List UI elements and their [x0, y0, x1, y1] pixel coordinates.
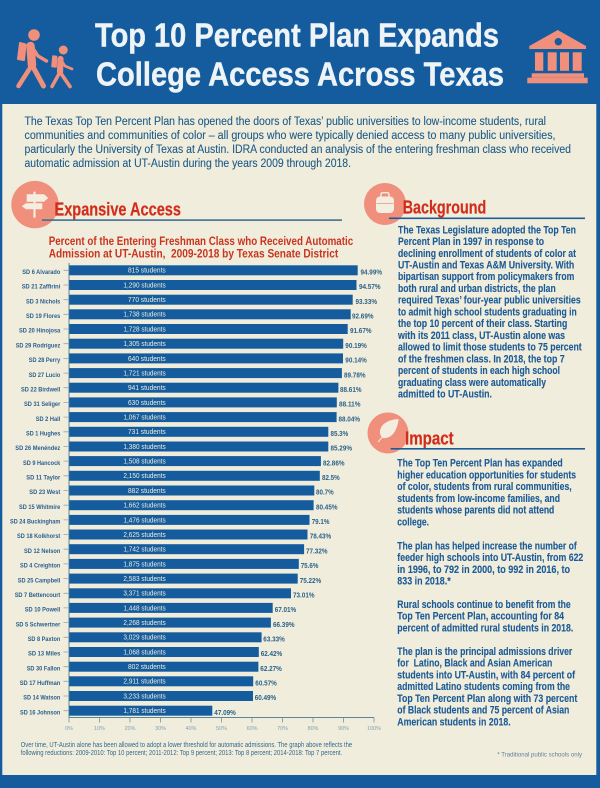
- percent values: 80.45%: [316, 504, 338, 511]
- intro text: [24, 114, 571, 170]
- percent values: 88.04%: [338, 416, 360, 423]
- student counts: 1,068 students: [123, 647, 166, 656]
- icon: two hikers: [18, 29, 72, 86]
- district labels: SD 23 West: [29, 489, 61, 496]
- district labels: SD 9 Hancock: [23, 460, 61, 467]
- percent values: 62.27%: [260, 666, 282, 673]
- x axis labels: [65, 726, 381, 732]
- x axis labels: 60%: [247, 726, 258, 732]
- student counts: 3,029 students: [123, 633, 166, 642]
- heading: Impact: Impact: [405, 428, 454, 448]
- student counts: 1,875 students: [123, 559, 166, 568]
- student counts: 3,371 students: [123, 589, 166, 598]
- district labels: SD 8 Paxton: [28, 636, 60, 643]
- student counts: 1,738 students: [123, 310, 166, 319]
- district labels: SD 29 Rodríguez: [16, 342, 60, 349]
- x axis labels: 100%: [367, 726, 381, 732]
- student counts: 941 students: [128, 383, 166, 392]
- student counts: 882 students: [128, 486, 166, 495]
- student counts: 630 students: [128, 398, 166, 407]
- student counts: 1,728 students: [123, 324, 166, 333]
- percent values: 63.33%: [263, 636, 285, 644]
- district labels: SD 3 Nichols: [26, 298, 61, 305]
- district labels: SD 21 Zaffirini: [22, 284, 61, 291]
- student counts: 640 students: [128, 354, 166, 363]
- text block: background: Percent Plan in 1997 in response to: [398, 236, 544, 248]
- percent values: 79.1%: [312, 519, 329, 526]
- chart title: Percent of the Entering Freshman Class who Received Automatic: [49, 234, 353, 248]
- percent values: 93.33%: [356, 299, 377, 306]
- percent values: 90.19%: [345, 343, 367, 350]
- percent values: 78.43%: [310, 534, 331, 541]
- district labels: SD 10 Powell: [25, 607, 61, 614]
- x axis labels: 40%: [186, 726, 197, 732]
- percent values: 85.29%: [330, 446, 352, 453]
- district labels: SD 26 Menéndez: [15, 445, 60, 452]
- district labels: SD 20 Hinojosa: [19, 328, 61, 335]
- percent values: 89.78%: [344, 372, 366, 379]
- icon: leaf in circle: [368, 412, 408, 454]
- text block: impact: students from low-income families, and: [397, 493, 560, 505]
- percent values: 60.57%: [255, 680, 277, 688]
- student counts: 1,290 students: [123, 280, 166, 289]
- intro text: automatic admission at UT-Austin during the years 2009 through 2018.: [24, 156, 351, 170]
- chart footnote: Over time, UT-Austin alone has been allowed to adopt a lower threshold for automatic admissions. The graph above reflects the: [21, 740, 352, 749]
- text block: background: [397, 224, 582, 400]
- student counts: 770 students: [128, 295, 166, 304]
- student counts: 1,781 students: [123, 706, 166, 715]
- x axis labels: 70%: [277, 726, 288, 732]
- student counts: 1,448 students: [123, 603, 166, 612]
- percent values: 60.49%: [255, 695, 276, 702]
- student counts: 815 students: [128, 266, 166, 275]
- student counts: 1,742 students: [123, 545, 166, 554]
- heading: Expansive Access: Expansive Access: [54, 200, 181, 220]
- text block: background: percent of students in each high school: [398, 365, 560, 377]
- district labels: SD 30 Fallon: [27, 665, 60, 672]
- student counts: 731 students: [128, 427, 166, 436]
- district labels: SD 12 Nelson: [24, 548, 60, 555]
- x axis labels: 20%: [125, 726, 136, 732]
- district labels: SD 15 Whitmire: [19, 504, 61, 511]
- x axis labels: 30%: [155, 726, 166, 732]
- district labels: SD 1 Hughes: [26, 430, 61, 438]
- percent values: 94.99%: [360, 270, 382, 276]
- percent values: 92.69%: [352, 314, 374, 320]
- district labels: SD 4 Creighton: [20, 563, 60, 570]
- district labels: SD 18 Kolkhorst: [17, 533, 61, 540]
- text block: impact: 833 in 2018.*: [397, 576, 451, 588]
- percent values: 47.09%: [214, 710, 236, 717]
- student counts: 2,911 students: [123, 677, 166, 686]
- student counts: 2,150 students: [123, 471, 166, 480]
- district labels: SD 27 Lucio: [29, 372, 60, 379]
- x axis labels: 80%: [308, 726, 319, 732]
- icon: backpack in circle: [364, 183, 406, 225]
- text block: impact: Top Ten Percent Plan, accounting for 84: [397, 611, 565, 623]
- student counts: 1,067 students: [123, 412, 166, 422]
- chart footnote: [21, 740, 352, 757]
- student counts: 2,268 students: [123, 618, 166, 627]
- heading: Background: Background: [403, 197, 486, 217]
- text block: background: admitted to UT-Austin.: [398, 388, 492, 400]
- district labels: SD 16 Johnson: [20, 709, 60, 716]
- bars: [69, 265, 358, 716]
- chart title: [49, 234, 353, 261]
- percent values: 77.32%: [306, 548, 328, 555]
- title: Top 10 Percent Plan Expands: [95, 16, 499, 54]
- percent values: 85.3%: [330, 431, 348, 438]
- icon: signpost in circle: [11, 181, 59, 228]
- x axis labels: 90%: [338, 726, 349, 732]
- percent values: [214, 270, 382, 717]
- district labels: SD 5 Schwertner: [16, 621, 61, 628]
- percent values: 82.5%: [322, 475, 340, 482]
- title: [95, 16, 504, 92]
- title: College Access Across Texas: [96, 56, 504, 92]
- percent values: 80.7%: [316, 490, 334, 497]
- district labels: SD 11 Taylor: [26, 474, 61, 482]
- percent values: 94.57%: [359, 284, 380, 291]
- text block: background: graduating class were automatically: [398, 377, 547, 389]
- percent values: 75.22%: [300, 578, 321, 585]
- district labels: SD 14 Watson: [23, 695, 60, 702]
- district labels: [10, 269, 61, 716]
- percent values: 88.11%: [339, 402, 360, 409]
- percent values: 82.86%: [323, 460, 344, 467]
- district labels: SD 19 Flores: [26, 313, 61, 320]
- icon: university building: [527, 30, 588, 83]
- district labels: SD 7 Bettencourt: [15, 592, 61, 599]
- district labels: SD 2 Hall: [36, 416, 61, 423]
- student counts: 1,508 students: [123, 456, 166, 466]
- text block: impact: for Latino, Black and Asian American: [397, 658, 553, 670]
- text block: impact: college.: [397, 516, 429, 528]
- student counts: 1,380 students: [123, 442, 166, 451]
- district labels: SD 28 Perry: [29, 357, 61, 364]
- district labels: SD 17 Huffman: [20, 680, 60, 687]
- x axis labels: 50%: [216, 726, 227, 732]
- district labels: SD 24 Buckingham: [10, 519, 61, 526]
- student counts: 1,305 students: [123, 339, 166, 348]
- student counts: [123, 266, 166, 715]
- district labels: SD 13 Miles: [28, 651, 61, 658]
- student counts: 2,583 students: [123, 574, 166, 583]
- bar chart: [10, 263, 382, 732]
- x axis labels: 10%: [94, 726, 105, 732]
- chart title: Admission at UT-Austin, 2009-2018 by Texas Senate District: [49, 247, 338, 261]
- text block: impact: American students in 2018.: [397, 716, 511, 728]
- footnote: traditional public schools: * Traditional public schools only: [497, 751, 583, 758]
- text block: impact: [397, 458, 583, 728]
- percent values: 66.39%: [273, 622, 294, 629]
- student counts: 802 students: [128, 662, 166, 671]
- text block: impact: students whose parents did not attend: [397, 505, 554, 517]
- district labels: SD 25 Campbell: [18, 577, 61, 584]
- district labels: SD 6 Alvarado: [22, 269, 60, 276]
- student counts: 1,721 students: [123, 368, 166, 378]
- student counts: 3,233 students: [123, 691, 166, 700]
- percent values: 88.61%: [340, 387, 362, 394]
- percent values: 67.01%: [275, 607, 296, 614]
- text block: background: both rural and urban districts, the plan: [398, 283, 556, 295]
- student counts: 2,625 students: [123, 530, 166, 539]
- student counts: 1,662 students: [123, 501, 166, 510]
- percent values: 73.01%: [293, 592, 314, 600]
- percent values: 62.42%: [261, 651, 282, 658]
- percent values: 75.6%: [301, 563, 318, 570]
- student counts: 1,476 students: [123, 515, 166, 524]
- district labels: SD 22 Birdwell: [21, 386, 61, 393]
- district labels: SD 31 Seliger: [24, 401, 61, 408]
- x axis labels: 0%: [65, 726, 73, 732]
- chart footnote: following reductions: 2009-2010: Top 10 percent; 2011-2012: Top 9 percent; 2013: Top 8 percent; 2014-2018: Top 7 percent.: [21, 748, 342, 757]
- percent values: 90.14%: [345, 358, 367, 365]
- percent values: 91.67%: [350, 328, 372, 335]
